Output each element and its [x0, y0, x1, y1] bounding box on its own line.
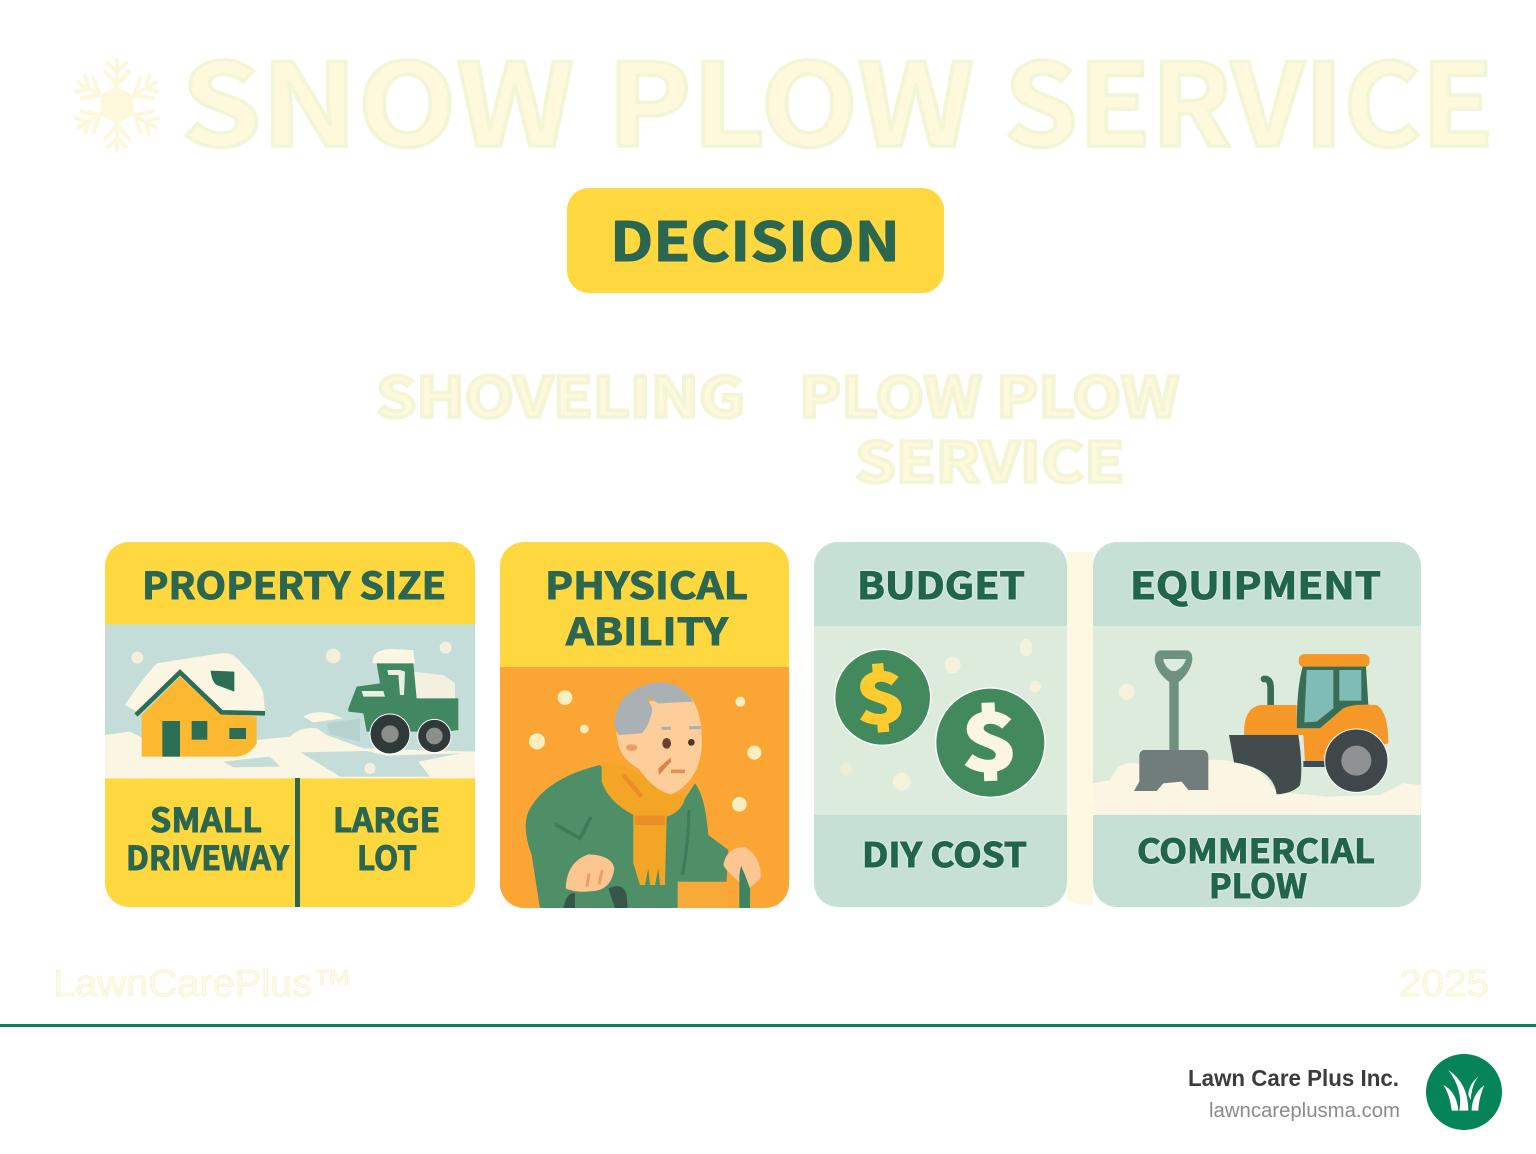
- panel: equipment: COMMERCIAL: [1137, 825, 1375, 873]
- panel: equipment: PLOW: [1209, 860, 1307, 908]
- illustration: shovel and orange plow tractor: [1093, 650, 1421, 815]
- title: SNOW: [181, 14, 574, 179]
- icon: dollar coins: $: [960, 679, 1018, 793]
- watermark: year: 2025: [1399, 963, 1489, 1005]
- heading: plow service: PLOW PLOW: [799, 353, 1179, 433]
- panel: property size: LOT: [357, 832, 417, 880]
- panel: property size: SMALL: [150, 794, 262, 842]
- title: [181, 14, 1494, 179]
- panel: equipment: [1093, 542, 1421, 908]
- heading: plow service: SERVICE: [855, 418, 1124, 498]
- panel: budget: DIY COST: [862, 828, 1027, 877]
- decision badge: [567, 188, 944, 293]
- footer rule: [0, 1024, 1536, 1027]
- footer url: lawncareplusma.com: [1209, 1100, 1400, 1122]
- panel: physical ability: [500, 542, 789, 909]
- icon: snowflake: [72, 60, 162, 150]
- heading: shoveling: SHOVELING: [376, 353, 745, 433]
- panel: budget: BUDGET: [857, 556, 1025, 610]
- panel: physical ability: ABILITY: [565, 602, 729, 656]
- panel: property size: DRIVEWAY: [126, 832, 290, 880]
- icon: dollar coins: [835, 639, 1045, 797]
- icon: dollar coins: $: [852, 641, 908, 744]
- panel: property size: PROPERTY SIZE: [142, 556, 446, 610]
- illustration: house and small tractor in snow: [105, 624, 475, 778]
- title: SERVICE: [1004, 14, 1494, 179]
- title: PLOW: [607, 14, 974, 179]
- watermark: brand: LawnCarePlus™: [53, 963, 352, 1005]
- panel: property size: [105, 542, 475, 908]
- icon: lawn care logo: [1426, 1054, 1502, 1130]
- cream strip between panels: [1067, 552, 1093, 905]
- illustration: elderly man with cane: [526, 682, 761, 909]
- panel: physical ability: PHYSICAL: [545, 556, 748, 610]
- decision badge: DECISION: [610, 198, 900, 277]
- panel: budget: [814, 542, 1067, 907]
- footer company name: Lawn Care Plus Inc.: [1188, 1065, 1399, 1091]
- panel: property size: LARGE: [333, 794, 440, 842]
- panel: equipment: EQUIPMENT: [1130, 556, 1381, 610]
- heading: plow service: [799, 353, 1179, 498]
